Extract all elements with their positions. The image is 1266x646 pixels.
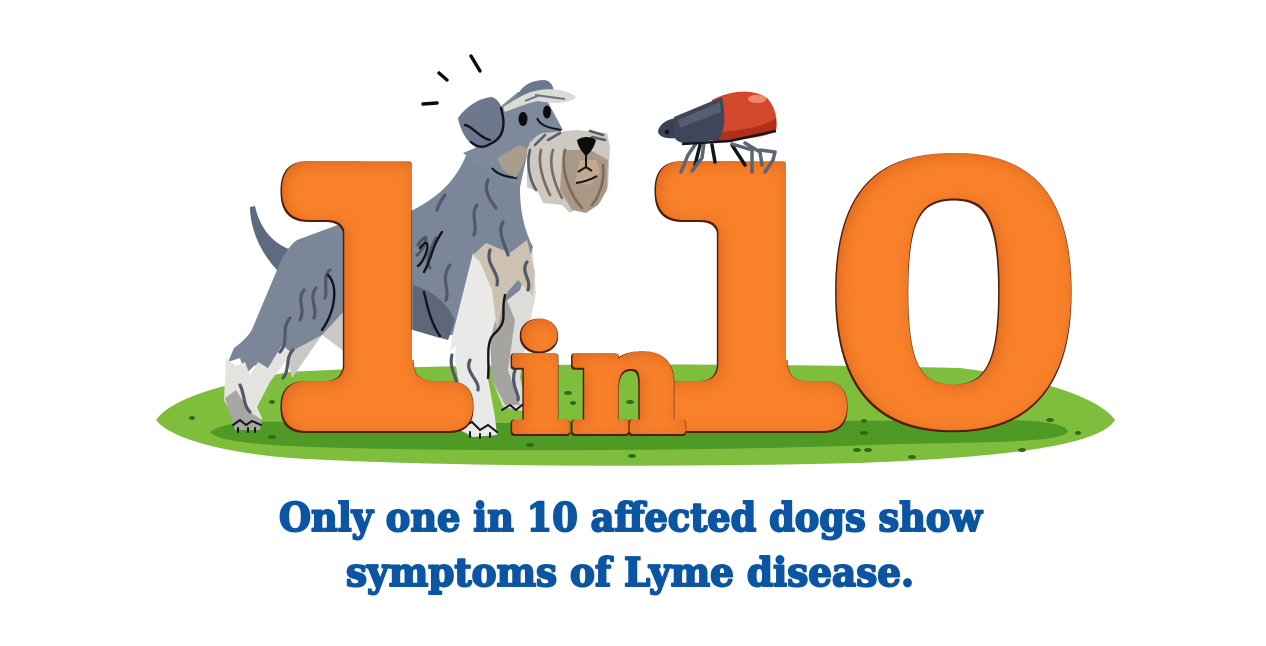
tick red abdomen [710, 92, 777, 141]
infographic scene [156, 54, 1115, 596]
word: in: in [510, 296, 686, 465]
dog head [463, 92, 563, 187]
dog body [228, 153, 533, 382]
fur marks [240, 180, 529, 412]
tick dark shield [674, 97, 724, 143]
icon: tick [658, 92, 777, 172]
collar fur line [492, 165, 517, 178]
near front leg [450, 253, 507, 437]
dog eyes [518, 112, 528, 126]
ground shadow [210, 420, 1068, 450]
beard [527, 130, 610, 213]
eyebrow tuft [503, 89, 576, 112]
dog paws [233, 405, 530, 438]
number: 0: 0 [820, 75, 1088, 507]
dog tail [250, 206, 292, 270]
hind lower leg [224, 345, 292, 430]
far front leg [490, 243, 536, 412]
number: second 1 [654, 161, 848, 433]
caption [279, 495, 983, 596]
caption line 2: symptoms of Lyme disease. [346, 550, 914, 596]
near ear [458, 97, 504, 148]
number: first 1 [280, 161, 474, 433]
cheek fur [497, 145, 530, 178]
tick legs [681, 142, 775, 172]
beard strands [528, 131, 605, 208]
black fur lines [322, 232, 505, 378]
number: first 1: 1 [253, 94, 490, 513]
caption line 1: Only one in 10 affected dogs show [279, 495, 983, 541]
belly shade [413, 285, 455, 340]
dog nose and mouth [577, 137, 596, 156]
icon: motion marks [423, 56, 480, 104]
number: second 1: 1 [627, 94, 864, 513]
far hind leg [285, 300, 345, 378]
chest fur [473, 240, 535, 330]
grass specks [189, 391, 1081, 459]
grass ground [156, 365, 1115, 466]
far ear [515, 80, 554, 100]
tick head [658, 118, 677, 138]
icon: schnauzer dog [224, 80, 610, 438]
